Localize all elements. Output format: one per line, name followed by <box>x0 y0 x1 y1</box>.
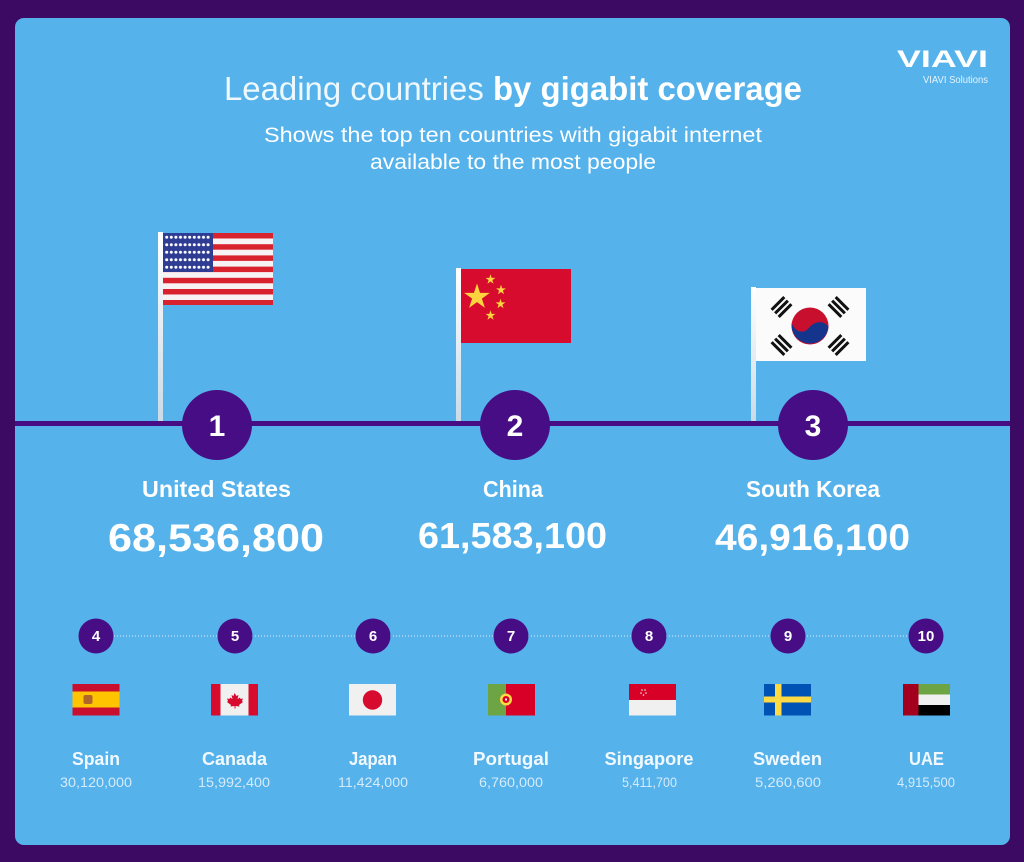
column: Sweden rank 9: Sweden <box>753 749 822 769</box>
rank badge 2 <box>480 390 550 460</box>
column: Singapore rank 8: Singapore <box>604 749 694 769</box>
column: Singapore rank 8: 5,411,700 <box>622 774 677 790</box>
rank badge 1: 1 <box>209 410 225 443</box>
logo: VIAVI Solutions: VIAVI <box>897 46 988 73</box>
column: Spain rank 4: 30,120,000 <box>60 774 132 790</box>
stat: China: 61,583,100 <box>418 515 607 556</box>
column: Singapore rank 8: 8 <box>645 628 653 645</box>
flag: South Korea <box>751 287 866 422</box>
column: Sweden rank 9 <box>753 618 822 790</box>
column: Japan rank 6 <box>338 618 408 790</box>
column: UAE rank 10: UAE <box>909 749 944 769</box>
column: Sweden rank 9: 9 <box>784 628 792 645</box>
column: Spain rank 4 <box>60 618 132 790</box>
column: Portugal rank 7: 6,760,000 <box>479 774 543 790</box>
column: Spain rank 4: Spain <box>72 749 120 769</box>
rank badge 1 <box>182 390 252 460</box>
stat: South Korea <box>715 476 910 558</box>
stat: United States: United States <box>142 476 291 502</box>
column: Canada rank 5: 15,992,400 <box>198 774 270 790</box>
column: Sweden rank 9: 5,260,600 <box>755 774 821 790</box>
column: Japan rank 6: 6 <box>369 628 377 645</box>
rank badge 2: 2 <box>507 410 523 443</box>
column: Japan rank 6: 11,424,000 <box>338 774 408 790</box>
column: Portugal rank 7: Portugal <box>473 749 549 769</box>
column: UAE rank 10: 10 <box>918 628 934 645</box>
dotted connector <box>96 635 926 637</box>
column: Portugal rank 7 <box>473 618 549 790</box>
stat: China: China <box>483 476 543 502</box>
column: Spain rank 4: 4 <box>92 628 101 645</box>
column: Singapore rank 8 <box>604 618 694 790</box>
stat: United States <box>108 476 324 560</box>
column: Canada rank 5 <box>198 618 270 790</box>
stat: China <box>418 476 607 556</box>
column: Canada rank 5: Canada <box>202 749 268 769</box>
flag: China <box>456 268 571 422</box>
stat: United States: 68,536,800 <box>108 517 324 560</box>
horizontal timeline <box>15 421 1010 426</box>
column: UAE rank 10 <box>897 618 955 790</box>
column: Japan rank 6: Japan <box>349 749 397 769</box>
flag: United States <box>158 232 273 422</box>
column: UAE rank 10: 4,915,500 <box>897 774 955 790</box>
stat: South Korea: 46,916,100 <box>715 517 910 558</box>
subtitle <box>264 124 762 174</box>
column: Canada rank 5: 5 <box>231 628 239 645</box>
title: Leading countries by gigabit coverage <box>224 70 802 107</box>
subtitle: available to the most people <box>370 151 656 174</box>
rank badge 3 <box>778 390 848 460</box>
logo: VIAVI Solutions <box>897 46 988 86</box>
rank badge 3: 3 <box>805 410 821 443</box>
stat: South Korea: South Korea <box>746 476 880 502</box>
subtitle: Shows the top ten countries with gigabit internet <box>264 124 762 147</box>
column: Portugal rank 7: 7 <box>507 628 515 645</box>
logo: VIAVI Solutions: VIAVI Solutions <box>923 74 988 86</box>
